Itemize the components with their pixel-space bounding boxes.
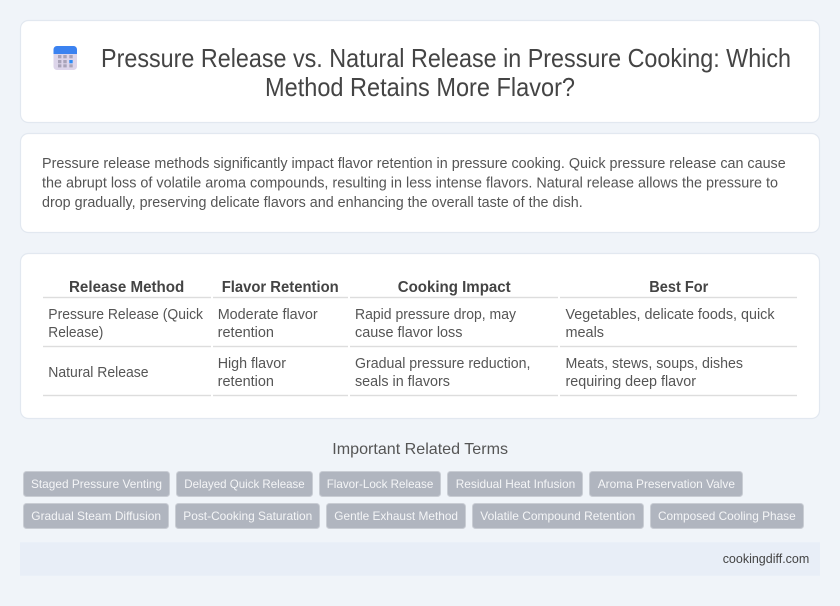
footer source text: cookingdiff.com (723, 551, 809, 566)
table row: pressure release: Rapid pressure drop, may (355, 307, 517, 323)
chip: Flavor-Lock Release: Flavor-Lock Release (327, 477, 434, 491)
related term chips (24, 472, 804, 528)
table row: natural release: Natural Release (48, 365, 148, 381)
chip: Delayed Quick Release (176, 472, 312, 496)
table row: natural release: retention (218, 374, 274, 390)
text block: summary: drop gradually, preserving delicate flavors and enhancing the overall taste of the dish. (42, 195, 583, 211)
chip: Aroma Preservation Valve: Aroma Preservation Valve (598, 477, 735, 491)
table row: pressure release: Moderate flavor (218, 307, 318, 323)
table row: natural release: High flavor (218, 356, 286, 372)
table row: natural release: Meats, stews, soups, dishes (566, 356, 743, 372)
table header row: Flavor Retention (222, 279, 339, 296)
panel: summary paragraph (20, 134, 820, 232)
title (101, 45, 791, 102)
table header row (43, 279, 797, 298)
text block: summary: the abrupt loss of volatile aroma compounds, resulting in less intense flavors. Natural release allows the pressure to (42, 176, 778, 192)
chip: Staged Pressure Venting (24, 472, 170, 496)
chip: Delayed Quick Release: Delayed Quick Release (184, 477, 305, 491)
chip: Volatile Compound Retention: Volatile Compound Retention (480, 509, 635, 523)
table row: pressure release: cause flavor loss (355, 325, 462, 341)
chip: Gradual Steam Diffusion (24, 504, 168, 528)
table row: pressure release: Pressure Release (Quick (48, 307, 204, 323)
chip: Flavor-Lock Release (320, 472, 440, 496)
chip: Staged Pressure Venting: Staged Pressure Venting (31, 477, 162, 491)
text block: summary (42, 156, 786, 211)
text block: summary: Pressure release methods significantly impact flavor retention in pressure cooking. Quick pressure release can cause (42, 156, 786, 172)
table header row: Release Method (69, 279, 184, 296)
chip: Residual Heat Infusion (448, 472, 582, 496)
table row: natural release: requiring deep flavor (566, 374, 696, 390)
chip: Composed Cooling Phase (650, 504, 804, 528)
table row: pressure release (43, 307, 797, 347)
chip: Post-Cooking Saturation (176, 504, 320, 528)
table header row: Cooking Impact (398, 279, 511, 296)
chip: Composed Cooling Phase: Composed Cooling Phase (658, 509, 796, 523)
chip: Gentle Exhaust Method (326, 504, 466, 528)
chip: Volatile Compound Retention (472, 504, 644, 528)
chip: Post-Cooking Saturation: Post-Cooking Saturation (183, 509, 312, 523)
title: Method Retains More Flavor? (265, 74, 575, 102)
chip: Gradual Steam Diffusion: Gradual Steam Diffusion (31, 509, 161, 523)
panel: header (20, 20, 820, 122)
chip: Residual Heat Infusion: Residual Heat Infusion (456, 477, 575, 491)
panel: comparison table (20, 254, 820, 418)
table row: pressure release: meals (566, 325, 604, 341)
table row: natural release: Gradual pressure reduction, (355, 356, 530, 372)
heading: related terms: Important Related Terms (332, 441, 508, 458)
table row: natural release (43, 356, 797, 396)
icon: calendar (54, 46, 77, 70)
table header row: Best For (649, 279, 708, 296)
chip: Aroma Preservation Valve (590, 472, 742, 496)
title: Pressure Release vs. Natural Release in Pressure Cooking: Which (101, 45, 791, 73)
table row: natural release: seals in flavors (355, 374, 450, 390)
table row: pressure release: Release) (48, 325, 103, 341)
chip: Gentle Exhaust Method: Gentle Exhaust Method (334, 509, 458, 523)
table row: pressure release: retention (218, 325, 274, 341)
table row: pressure release: Vegetables, delicate foods, quick (566, 307, 775, 323)
footer bar (20, 542, 820, 576)
